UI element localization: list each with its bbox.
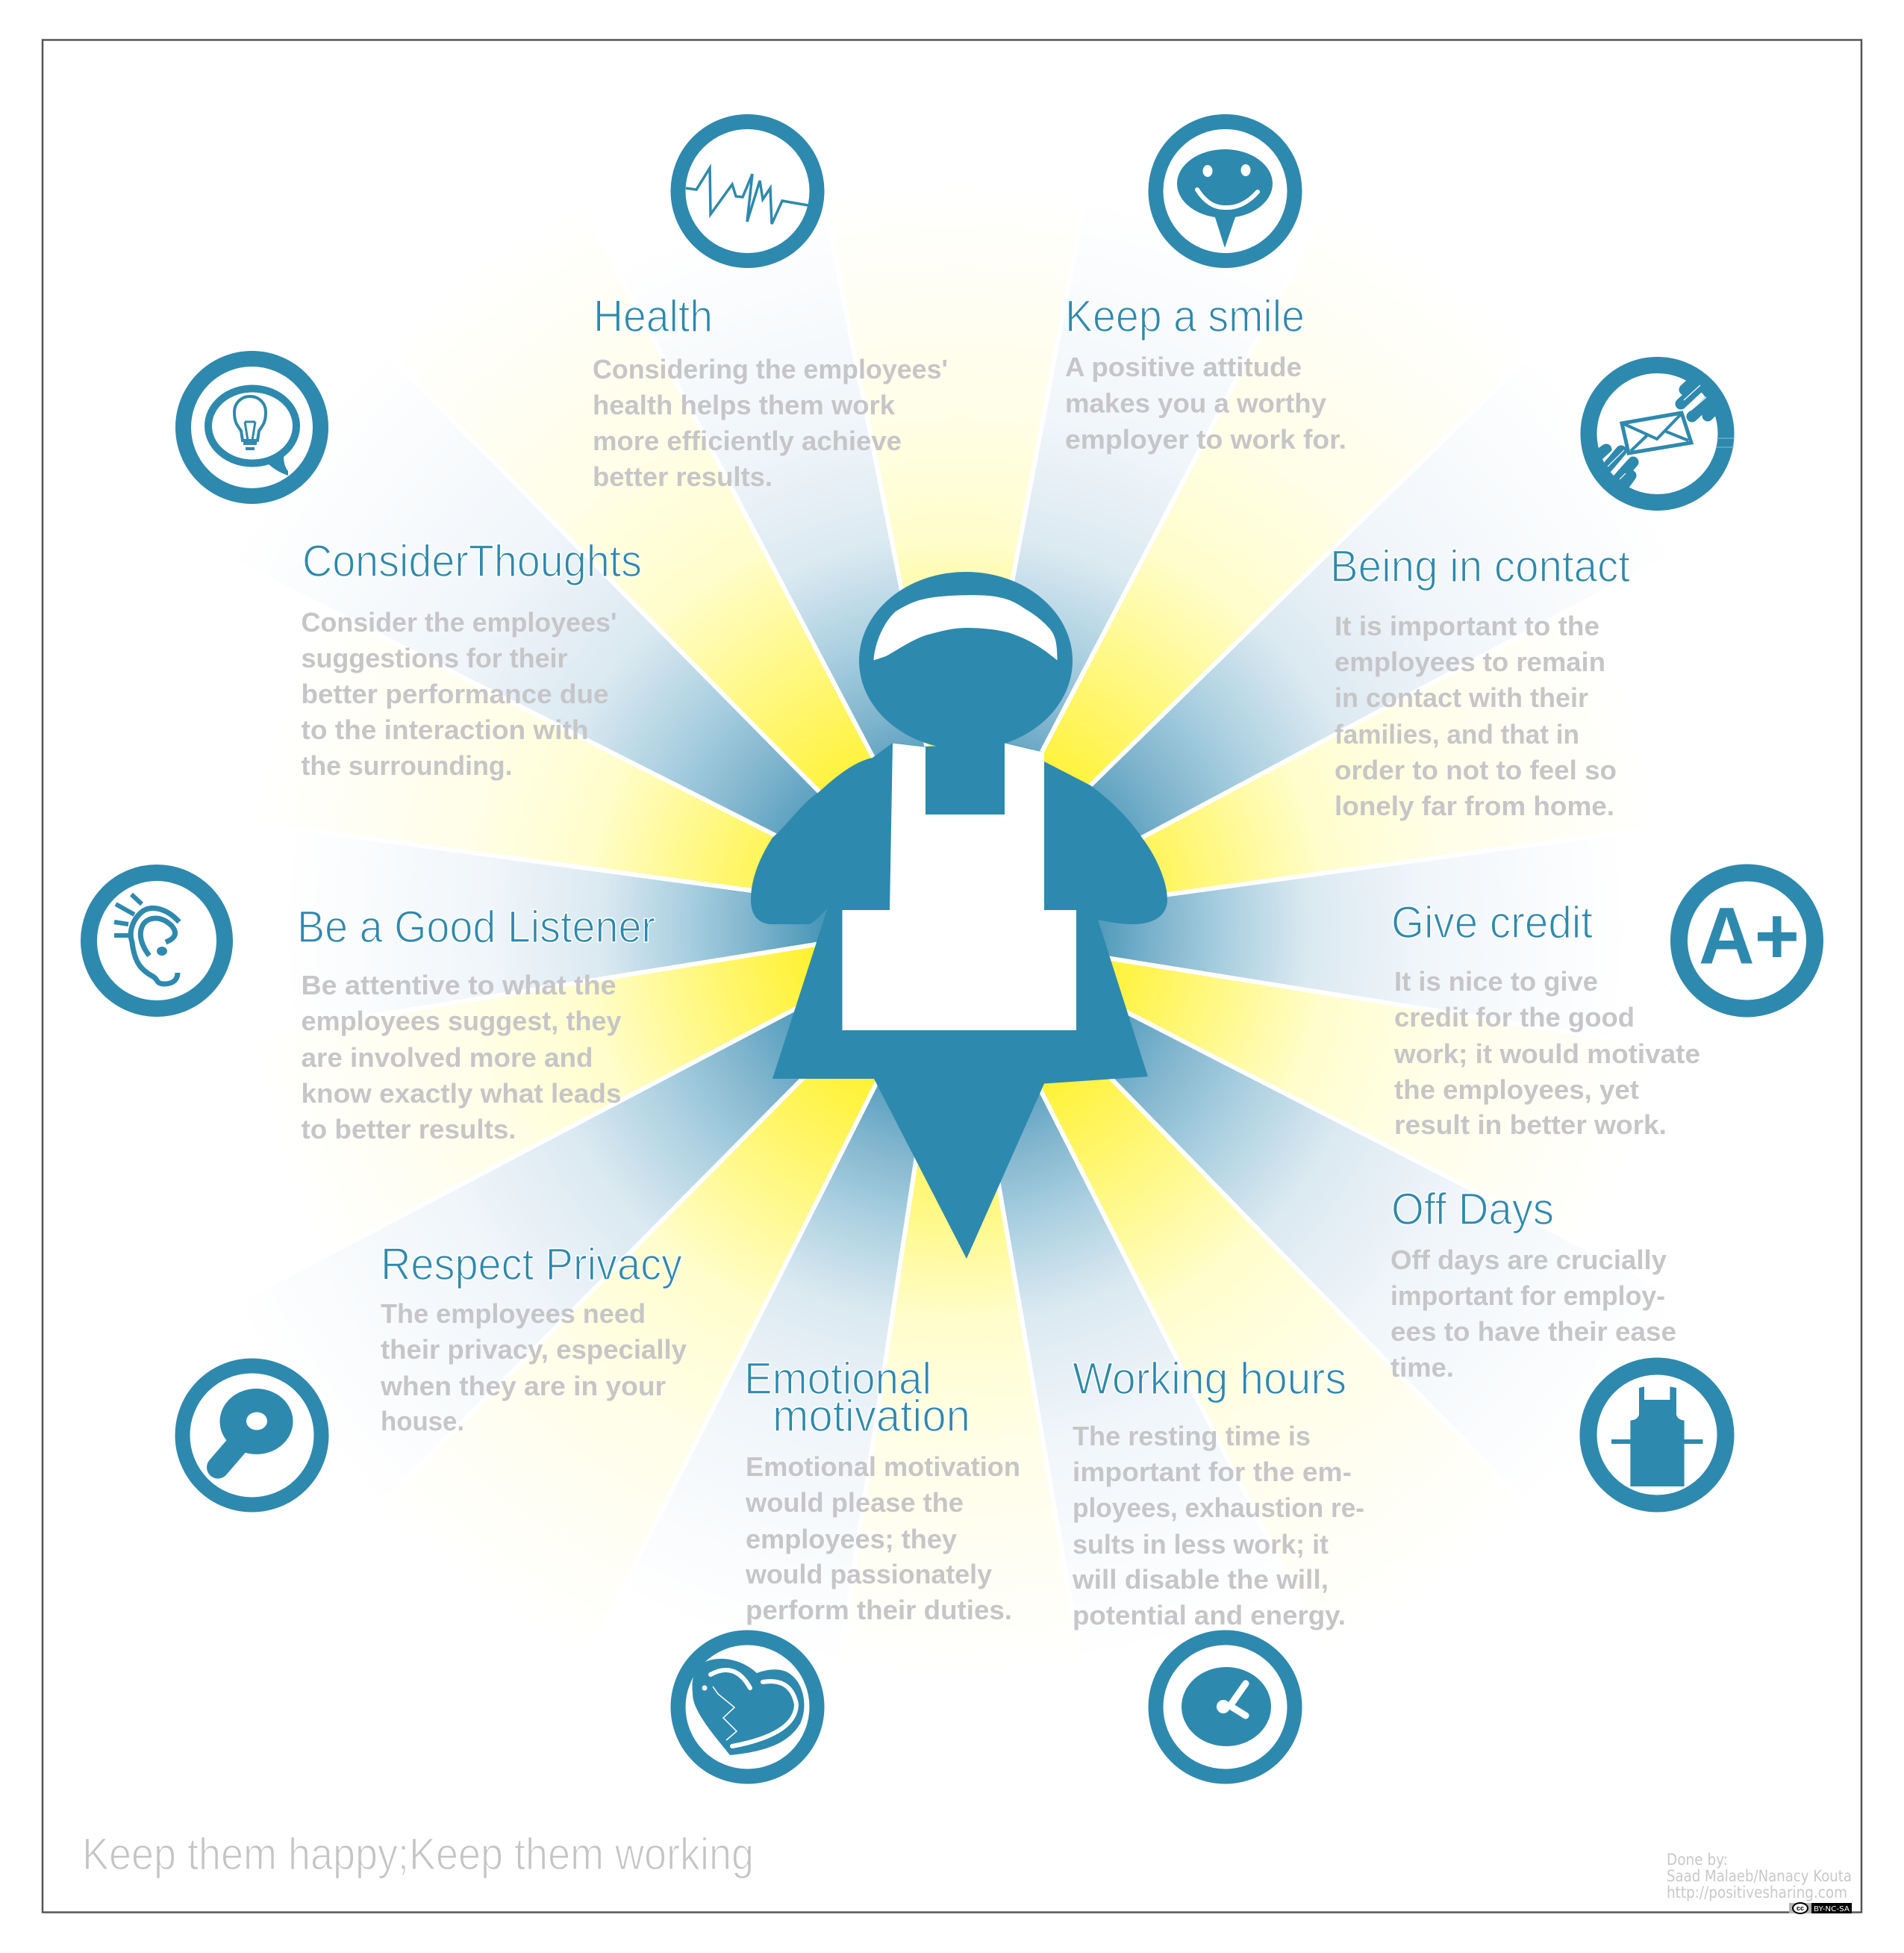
text: off days body: important for employ- (1390, 1280, 1665, 1311)
text: credit body (1393, 966, 1700, 1140)
text: thoughts body: better performance due (302, 679, 609, 709)
text: Health body: more efficiently achieve (593, 426, 902, 456)
text: hours body: potential and energy. (1073, 1600, 1346, 1630)
icon: heart (678, 1638, 817, 1777)
section: Off Days (1390, 1184, 1676, 1383)
text: emotional body: Emotional motivation (746, 1451, 1020, 1482)
heading: Be a Good Listener: Be a Good Listener (297, 902, 655, 952)
section: Keep a smile (1065, 291, 1346, 455)
credits: http://positivesharing.com (1667, 1884, 1847, 1901)
text: thoughts body (302, 607, 617, 781)
section: Respect Privacy (380, 1239, 687, 1436)
licence badge: BY-NC-SA (1814, 1905, 1850, 1913)
text: smile body: A positive attitude (1065, 352, 1302, 382)
text: thoughts body: the surrounding. (302, 750, 512, 781)
text: off days body: time. (1390, 1352, 1454, 1383)
heading: Being in contact: Being in contact (1330, 541, 1630, 591)
text: credit body: the employees, yet (1394, 1074, 1639, 1105)
text: off days body (1390, 1245, 1676, 1383)
icon: A plus grade: A+ (1699, 890, 1800, 981)
icon: apron (1588, 1366, 1726, 1504)
text: thoughts body: to the interaction with (302, 714, 588, 745)
heading: Emotional motivation: Emotional (744, 1354, 931, 1404)
text: contact body: lonely far from home. (1335, 791, 1614, 821)
text: listener body (302, 970, 622, 1144)
text: contact body: order to not to feel so (1335, 755, 1617, 785)
text: contact body (1335, 611, 1617, 821)
credits: Saad Malaeb/Nanacy Kouta (1667, 1867, 1852, 1885)
text: emotional body: perform their duties. (746, 1595, 1012, 1625)
section: Health (593, 291, 948, 492)
title: Keep them happy;Keep them working (82, 1829, 754, 1879)
text: hours body: ployees, exhaustion re- (1073, 1492, 1364, 1523)
icon: magnifier key (182, 1366, 321, 1505)
text: listener body: are involved more and (302, 1042, 593, 1073)
text: privacy body: house. (381, 1406, 464, 1436)
text: emotional body: would passionately (745, 1559, 993, 1589)
credits (1667, 1851, 1852, 1901)
section: Working hours (1072, 1354, 1364, 1630)
section: Being in contact (1330, 541, 1630, 821)
section: Be a Good Listener (297, 902, 655, 1144)
text: credit body: credit for the good (1394, 1002, 1635, 1032)
text: hours body: The resting time is (1073, 1421, 1311, 1451)
icon: pulse (678, 122, 817, 261)
text: listener body: Be attentive to what the (302, 970, 617, 1000)
icon: ear (89, 873, 225, 1009)
section: Consider Thoughts (302, 536, 642, 781)
credits: Done by: (1667, 1851, 1728, 1869)
heading: Respect Privacy: Respect Privacy (381, 1239, 682, 1289)
text: contact body: employees to remain (1335, 647, 1605, 677)
text: privacy body: when they are in your (380, 1371, 666, 1401)
licence badge: cc (1797, 1904, 1804, 1912)
text: Health body: Considering the employees' (593, 354, 948, 384)
text: contact body: It is important to the (1335, 611, 1599, 641)
text: listener body: to better results. (302, 1114, 516, 1144)
text: listener body: employees suggest, they (302, 1006, 622, 1036)
text: privacy body: The employees need (381, 1298, 646, 1329)
icon: bulb in speech bubble (184, 358, 321, 496)
text: emotional body: would please the (745, 1487, 964, 1518)
heading: Keep a smile: Keep a smile (1065, 291, 1305, 341)
text: contact body: families, and that in (1335, 719, 1579, 750)
central figure (751, 572, 1167, 1259)
heading: Emotional motivation (744, 1354, 970, 1441)
text: credit body: It is nice to give (1394, 966, 1598, 997)
text: listener body: know exactly what leads (302, 1078, 621, 1109)
text: Health body (593, 354, 948, 492)
text: off days body: Off days are crucially (1390, 1245, 1667, 1275)
icon: clock (1155, 1638, 1294, 1777)
text: credit body: result in better work. (1394, 1109, 1667, 1140)
text: smile body: employer to work for. (1065, 424, 1346, 455)
icon: smile (1155, 122, 1294, 261)
text: privacy body (380, 1298, 687, 1436)
text: hours body: sults in less work; it (1073, 1529, 1329, 1560)
text: emotional body: employees; they (746, 1524, 958, 1554)
icon: envelope and hands (1588, 365, 1734, 502)
licence badge (1789, 1903, 1852, 1913)
figure apron (842, 744, 1076, 1030)
text: off days body: ees to have their ease (1390, 1316, 1676, 1347)
heading: Health: Health (593, 291, 713, 341)
text: thoughts body: Consider the employees' (302, 607, 617, 638)
text: Health body: health helps them work (593, 390, 896, 420)
heading: Working hours: Working hours (1073, 1354, 1346, 1404)
text: privacy body: their privacy, especially (381, 1334, 687, 1365)
heading: Off Days: Off Days (1391, 1184, 1554, 1234)
text: hours body (1072, 1421, 1364, 1630)
section: Give credit (1391, 897, 1700, 1140)
heading: Emotional motivation: motivation (772, 1391, 970, 1441)
text: smile body (1065, 352, 1346, 455)
text: contact body: in contact with their (1335, 682, 1588, 713)
text: credit body: work; it would motivate (1393, 1038, 1700, 1069)
figure head (859, 572, 1073, 750)
section: Emotional motivation (744, 1354, 1020, 1625)
heading: Give credit: Give credit (1391, 897, 1593, 947)
icon: A plus grade (1679, 873, 1815, 1009)
figure body (751, 743, 1167, 1259)
text: hours body: will disable the will, (1072, 1564, 1329, 1595)
text: hours body: important for the em- (1073, 1457, 1352, 1487)
text: thoughts body: suggestions for their (302, 643, 567, 673)
heading: ConsiderThoughts: ConsiderThoughts (302, 536, 642, 586)
text: Health body: better results. (593, 461, 772, 492)
text: emotional body (745, 1451, 1020, 1625)
text: smile body: makes you a worthy (1065, 388, 1327, 418)
